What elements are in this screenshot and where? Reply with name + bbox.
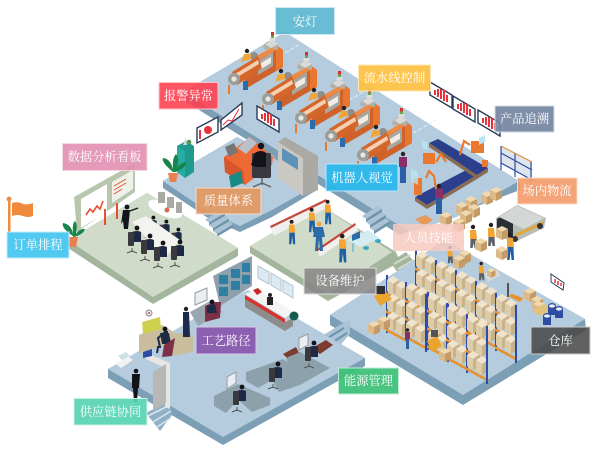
operators <box>399 152 443 214</box>
quality desk <box>224 137 273 188</box>
plant: quality office <box>163 154 187 182</box>
label: 仓库: 仓库 <box>548 333 573 348</box>
boxes: logistics <box>415 187 502 232</box>
floor: lower office <box>108 290 365 445</box>
label: 质量体系: 质量体系 <box>204 193 253 208</box>
label: 工艺路径 <box>196 327 256 354</box>
label: 数据分析看板: 数据分析看板 <box>68 149 141 164</box>
label: 人员技能 <box>393 224 464 251</box>
label: 设备维护: 设备维护 <box>315 273 365 288</box>
label: 产品追溯 <box>495 106 554 132</box>
monitor wall <box>213 256 252 306</box>
forklifts <box>374 286 451 362</box>
stairs: warehouse <box>322 320 350 352</box>
meeting board <box>74 163 135 232</box>
dashboards: workshop <box>197 82 500 143</box>
shelf: logistics <box>501 146 532 182</box>
label: 工艺路径: 工艺路径 <box>201 333 251 348</box>
warehouse racks <box>386 250 517 384</box>
windows <box>258 266 293 298</box>
warehouse person and boxes <box>368 316 410 349</box>
conveyor and robots <box>411 135 488 209</box>
meeting table <box>121 192 184 268</box>
office: security gate <box>116 349 170 411</box>
stairs: entrance <box>146 401 172 431</box>
drums and dashboard <box>543 274 564 325</box>
stairs: training <box>390 252 418 278</box>
plant: meeting room <box>63 221 85 247</box>
label: 供应链协同 <box>74 398 147 425</box>
label: 订单排程: 订单排程 <box>13 237 63 252</box>
label: 报警异常: 报警异常 <box>164 88 213 103</box>
label: 流水线控制: 流水线控制 <box>364 70 425 85</box>
label: 设备维护 <box>304 268 376 294</box>
floor: warehouse <box>330 240 586 405</box>
label: 订单排程 <box>7 232 69 258</box>
stairs: quality office <box>205 210 233 237</box>
training line <box>270 199 381 262</box>
stairs: workshop right <box>362 206 390 234</box>
label: 人员技能: 人员技能 <box>404 230 453 245</box>
floor: meeting room <box>68 193 238 304</box>
office: upper desks <box>139 288 222 357</box>
label: 机器人视觉 <box>326 164 398 191</box>
label: 供应链协同: 供应链协同 <box>80 404 141 419</box>
floor: machine workshop <box>183 32 520 235</box>
floor: quality office <box>163 137 318 232</box>
label: 场内物流 <box>518 178 577 204</box>
label: 安灯 <box>276 8 334 34</box>
logistics workers <box>448 223 514 282</box>
label: 质量体系 <box>196 188 261 214</box>
label: 流水线控制 <box>358 65 430 91</box>
floor: production training <box>250 205 400 301</box>
label: 能源管理: 能源管理 <box>344 373 394 388</box>
cabinets: quality office <box>177 137 318 196</box>
office: lower desks <box>214 334 333 413</box>
label: 数据分析看板 <box>62 144 147 170</box>
label: 能源管理 <box>338 368 398 394</box>
label: 仓库 <box>531 327 590 354</box>
label: 机器人视觉: 机器人视觉 <box>331 170 393 185</box>
label: 产品追溯: 产品追溯 <box>500 111 549 126</box>
label: 报警异常 <box>159 82 218 109</box>
flag <box>7 197 33 233</box>
label: 安灯: 安灯 <box>293 14 317 29</box>
label: 场内物流: 场内物流 <box>522 183 572 198</box>
delivery van <box>496 205 546 242</box>
machine row <box>228 32 412 170</box>
pallet truck <box>507 283 552 316</box>
reception desk <box>245 288 298 331</box>
